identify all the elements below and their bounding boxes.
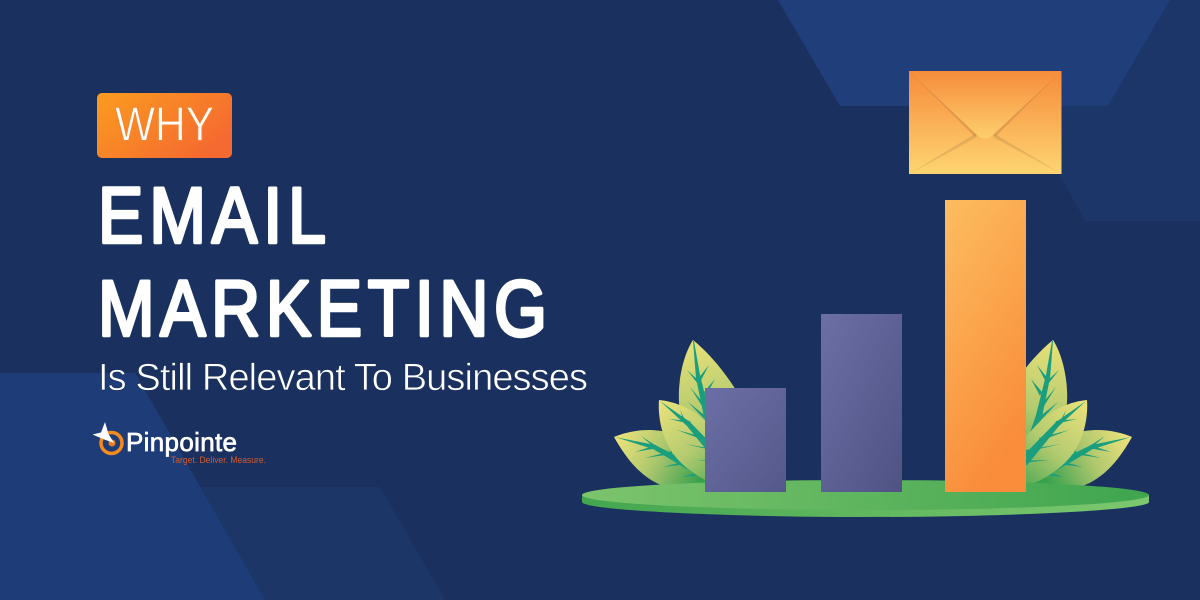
leaves: right cluster xyxy=(984,340,1132,491)
subtitle: Is Still Relevant To Businesses xyxy=(98,357,588,399)
title: EMAIL: EMAIL xyxy=(98,171,326,260)
bar: tall xyxy=(945,200,1026,492)
icon: target xyxy=(92,422,122,454)
bar: small xyxy=(705,388,786,492)
bar chart xyxy=(705,200,1026,492)
logo tagline: Target. Deliver. Measure. xyxy=(171,455,266,466)
leaves: left cluster xyxy=(614,340,762,491)
envelope flap xyxy=(909,71,1062,138)
platform xyxy=(582,480,1149,517)
logo: Pinpointe xyxy=(92,422,266,466)
icon: envelope xyxy=(909,71,1062,174)
background shape: top hexagon xyxy=(778,0,1170,106)
background shape: right hexagon xyxy=(1060,0,1200,221)
title: MARKETING: MARKETING xyxy=(98,264,547,353)
background shape: bottom-left hexagon xyxy=(0,373,265,600)
badge: WHY xyxy=(97,93,232,158)
bar: medium xyxy=(821,314,902,492)
background shape: bottom-mid hexagon xyxy=(200,487,445,600)
logo wordmark: Pinpointe xyxy=(126,427,237,457)
badge: WHY: WHY xyxy=(115,98,214,152)
